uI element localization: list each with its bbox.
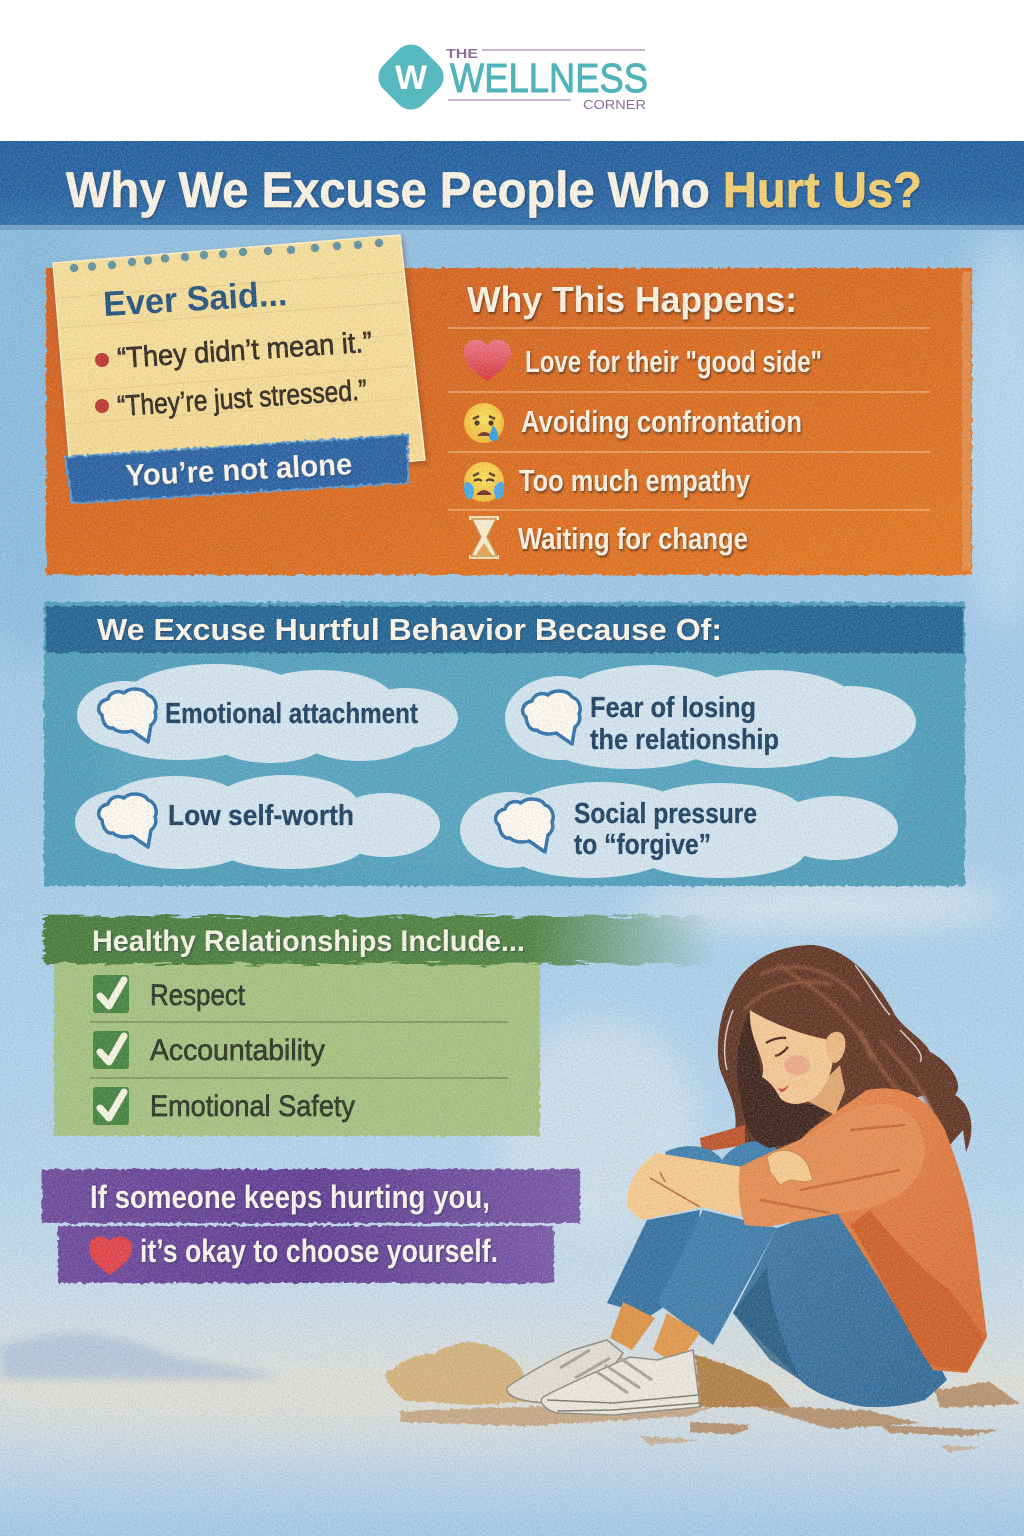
item: accountability (93, 1031, 325, 1069)
forearm and hands (627, 1153, 743, 1220)
cloud: fear of losing: Fear of losing (590, 692, 756, 724)
header logo: WELLNESS (450, 55, 648, 101)
item: respect: Respect (150, 979, 246, 1012)
cloud: low self-worth (75, 775, 440, 869)
logo mark (371, 37, 451, 117)
face (750, 1010, 833, 1104)
panel: healthy relationships (44, 916, 716, 1136)
spiral binding (70, 239, 383, 272)
sweater torso (745, 1088, 987, 1373)
section heading (46, 606, 963, 653)
quote two: “They’re just stressed.” (116, 374, 368, 423)
item: accountability: Accountability (150, 1034, 325, 1067)
far sleeve (700, 1125, 745, 1152)
ribbon: you're not alone: You’re not alone (125, 446, 353, 493)
cloud: fear of losing (505, 665, 916, 769)
heading: Why This Happens: (467, 279, 797, 320)
header logo (0, 0, 1024, 141)
panel: why this happens (46, 268, 972, 575)
knees (665, 1141, 778, 1175)
item: emotional safety: Emotional Safety (150, 1090, 355, 1123)
front sleeve (739, 1104, 925, 1227)
item: too much empathy (464, 462, 751, 502)
icon: heart (464, 340, 511, 381)
item: love: Love for their "good side" (525, 344, 822, 379)
icon: sobbing face (464, 462, 504, 502)
cloud: fear of losing: the relationship (590, 724, 779, 756)
near shoe (541, 1350, 700, 1415)
item: emotional safety (93, 1087, 355, 1125)
panel: we excuse hurtful behavior (44, 602, 965, 886)
item: waiting for change: Waiting for change (518, 521, 748, 556)
item: respect (93, 975, 246, 1013)
header logo: THE (446, 46, 478, 61)
hand on sleeve (767, 1150, 813, 1185)
title banner (0, 141, 1024, 230)
icon: heart (89, 1236, 132, 1275)
quote one: “They didn’t mean it.” (116, 327, 373, 375)
hair back (718, 945, 971, 1152)
section heading: Healthy Relationships Include... (92, 925, 525, 958)
panel: choose yourself callout: If someone keeps hurting you, (90, 1179, 490, 1215)
ear (826, 1032, 845, 1063)
near ankle (653, 1313, 700, 1365)
section heading (44, 916, 716, 964)
cloud: social pressure: Social pressure (574, 798, 757, 830)
hair front (737, 1010, 832, 1148)
icon: hourglass (469, 518, 499, 557)
far ankle (610, 1302, 655, 1350)
thigh and hip jeans (733, 1205, 947, 1407)
logo mark: W (395, 59, 428, 97)
closed eye and brow (766, 1038, 788, 1056)
panel: choose yourself callout (42, 1169, 580, 1283)
item: too much empathy: Too much empathy (519, 463, 751, 498)
item: waiting for change (469, 518, 748, 557)
panel: choose yourself callout: it’s okay to choose yourself. (140, 1233, 498, 1269)
near lower leg jeans (657, 1210, 777, 1345)
cloud: social pressure: to “forgive” (574, 829, 711, 861)
panel: ever said note (53, 235, 425, 503)
lips (777, 1084, 789, 1092)
header logo: CORNER (583, 97, 646, 112)
section heading: We Excuse Hurtful Behavior Because Of: (97, 612, 722, 647)
cloud: low self-worth: Low self-worth (168, 800, 354, 832)
icon: crying face (464, 403, 504, 443)
item: love (464, 340, 822, 381)
cloud: emotional attachment (77, 664, 458, 763)
illustration: woman sitting hugging her knees (507, 945, 987, 1415)
far shoe (507, 1340, 623, 1403)
title text: Why We Excuse People Who Hurt Us? (66, 162, 922, 218)
cloud: emotional attachment: Emotional attachment (165, 698, 418, 730)
neck (805, 1065, 845, 1115)
ground: scattered autumn leaves (385, 1343, 1020, 1453)
heading: Ever Said... (102, 274, 288, 324)
item: avoiding confrontation (464, 403, 802, 443)
ribbon: you're not alone (65, 435, 408, 503)
cloud: social pressure (460, 782, 898, 878)
far leg jeans (607, 1210, 700, 1316)
item: avoiding confrontation: Avoiding confrontation (521, 404, 802, 439)
